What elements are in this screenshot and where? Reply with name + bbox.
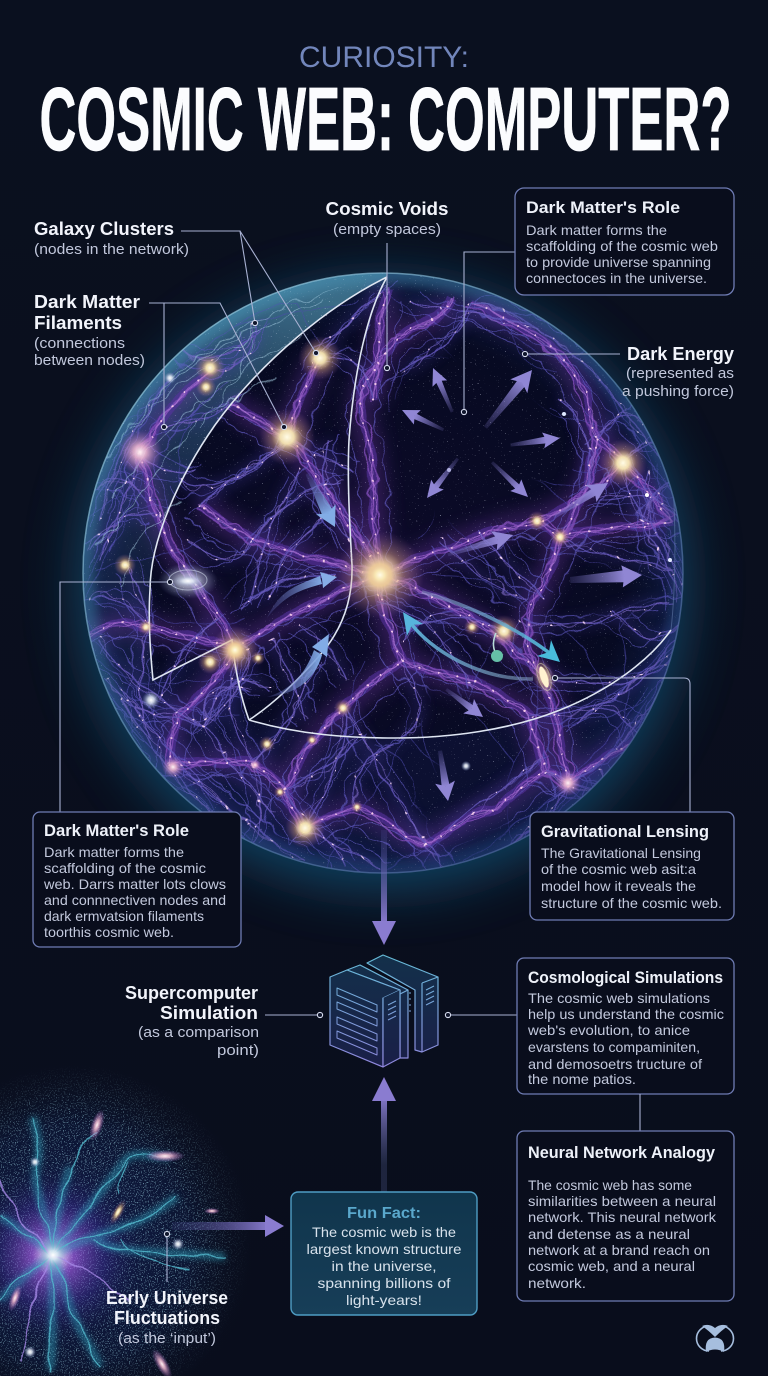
icon: supercomputer server stack	[330, 955, 438, 1067]
panel: Dark Matter's Role (top): Dark matter forms the	[526, 222, 667, 238]
panel: Fun Fact	[291, 1192, 477, 1315]
expansion arrows	[430, 475, 643, 803]
panel: Cosmological Simulations: Cosmological Simulations	[528, 968, 723, 987]
panel: Cosmological Simulations: the nome patios.	[528, 1071, 636, 1087]
label: Supercomputer Simulation: Simulation	[160, 1003, 258, 1023]
label: Dark Matter Filaments: Dark Matter	[34, 292, 140, 312]
galaxy: lensing spiral	[533, 660, 555, 694]
panel: Cosmological Simulations	[445, 958, 734, 1094]
arrow: sphere to supercomputer	[372, 830, 396, 945]
panel: Dark Matter's Role (left)	[33, 579, 241, 947]
arrow: fun fact up to supercomputer	[372, 1077, 396, 1192]
panel: Fun Fact: The cosmic web is the	[312, 1224, 456, 1240]
label: Early Universe Fluctuations: Early Universe	[106, 1288, 228, 1308]
panel: Fun Fact: largest known structure	[306, 1241, 462, 1257]
panel: Dark Matter's Role (top): connectoces in the universe.	[526, 270, 707, 286]
panel: Dark Matter's Role (left): and connnectiven nodes and	[44, 892, 226, 908]
panel: Dark Matter's Role (top): Dark Matter's Role	[526, 198, 680, 217]
panel: Fun Fact: Fun Fact:	[347, 1205, 421, 1222]
panel: Dark Matter's Role (top): to provide universe spanning	[526, 254, 711, 270]
galaxy nodes	[114, 336, 672, 848]
panel: Gravitational Lensing: Gravitational Lensing	[541, 822, 709, 841]
title block	[40, 41, 732, 170]
label: Supercomputer Simulation: point)	[217, 1042, 259, 1059]
panel: Dark Matter's Role (left): dark ermvatsion filaments	[44, 908, 204, 924]
panel: Neural Network Analogy: cosmic web, and a neural	[528, 1258, 695, 1274]
icon: logo mark	[696, 1325, 734, 1352]
panel: Neural Network Analogy: network.	[528, 1275, 586, 1291]
panel: Cosmological Simulations: The cosmic web simulations	[528, 990, 710, 1006]
label: Dark Energy: Dark Energy	[627, 344, 734, 364]
panel: Neural Network Analogy: The cosmic web has some	[528, 1177, 692, 1193]
subtitle: CURIOSITY:	[299, 41, 469, 74]
label: Dark Matter Filaments: Filaments	[34, 313, 122, 333]
panel: Gravitational Lensing: structure of the cosmic web.	[541, 895, 722, 911]
label: Cosmic Voids	[326, 199, 448, 371]
panel: Cosmological Simulations: evarstens to compaminiten,	[528, 1039, 700, 1055]
label: Supercomputer Simulation: Supercomputer	[125, 983, 258, 1003]
panel: Fun Fact: in the universe,	[332, 1258, 436, 1274]
panel: Neural Network Analogy: similarities between a neural	[528, 1193, 716, 1209]
panel: Neural Network Analogy: network. This neural network	[528, 1209, 717, 1225]
illustration: early universe burst	[0, 1070, 246, 1376]
label: Cosmic Voids: (empty spaces)	[333, 221, 441, 238]
panel: Dark Matter's Role (left): Dark Matter's Role	[44, 821, 189, 840]
label: Galaxy Clusters: Galaxy Clusters	[34, 219, 174, 239]
sphere: cosmic web globe	[40, 260, 700, 891]
gravity inflow arrows	[267, 473, 337, 697]
label: Dark Matter Filaments: (connections	[34, 335, 125, 352]
panel: Dark Matter's Role (left): Dark matter forms the	[44, 844, 184, 860]
panel: Gravitational Lensing: model how it reveals the	[541, 878, 696, 894]
label: Galaxy Clusters	[34, 219, 319, 356]
panel: Dark Matter's Role (top)	[461, 188, 734, 415]
panel: Fun Fact: light-years!	[346, 1292, 422, 1308]
panel: Dark Matter's Role (left): toorthis cosmic web.	[44, 924, 174, 940]
panel: Cosmological Simulations: web's evolution, to anice	[527, 1022, 690, 1038]
panel: Dark Matter's Role (top): scaffolding of the cosmic web	[526, 238, 718, 254]
label: Supercomputer Simulation: (as a comparison	[138, 1024, 259, 1041]
panel: Gravitational Lensing	[530, 675, 734, 920]
label: Dark Energy: a pushing force)	[622, 383, 734, 400]
panel: Dark Matter's Role (left): scaffolding of the cosmic	[44, 860, 206, 876]
glowing clouds	[6, 1108, 220, 1376]
panel: Neural Network Analogy: and detense as a neural	[528, 1226, 690, 1242]
label: Early Universe Fluctuations: (as the ‘input’)	[118, 1330, 216, 1347]
label: Dark Energy: (represented as	[626, 365, 734, 382]
panel: Gravitational Lensing: of the cosmic web asit:a	[541, 861, 696, 877]
wedge cut-away lines	[149, 277, 671, 738]
teal lensing arcs	[403, 592, 560, 679]
panel: Neural Network Analogy	[517, 1131, 734, 1301]
label: Dark Matter Filaments	[34, 292, 287, 430]
dark energy arrows	[399, 363, 561, 503]
tadpole lensing glyph	[491, 633, 503, 662]
panel: Gravitational Lensing: The Gravitational Lensing	[541, 845, 701, 861]
panel: Neural Network Analogy: Neural Network Analogy	[528, 1143, 716, 1162]
panel: Neural Network Analogy: network at a brand reach on	[528, 1242, 710, 1258]
galaxy: white spiral	[160, 564, 216, 598]
label: Dark Matter Filaments: between nodes)	[34, 352, 145, 369]
label: Supercomputer Simulation	[125, 983, 323, 1059]
label: Galaxy Clusters: (nodes in the network)	[34, 241, 189, 258]
panel: Cosmological Simulations: help us understand the cosmic	[528, 1006, 724, 1022]
label: Early Universe Fluctuations: Fluctuations	[114, 1308, 220, 1328]
label: Early Universe Fluctuations	[106, 1231, 228, 1347]
label: Cosmic Voids: Cosmic Voids	[326, 199, 448, 219]
panel: Cosmological Simulations: and demosoetrs tructure of	[528, 1056, 702, 1072]
panel: Dark Matter's Role (left): web. Darrs matter lots clows	[43, 876, 226, 892]
label: Dark Energy	[522, 344, 734, 400]
panel: Fun Fact: spanning billions of	[318, 1275, 451, 1291]
arrow: early universe to fun fact	[172, 1215, 284, 1237]
